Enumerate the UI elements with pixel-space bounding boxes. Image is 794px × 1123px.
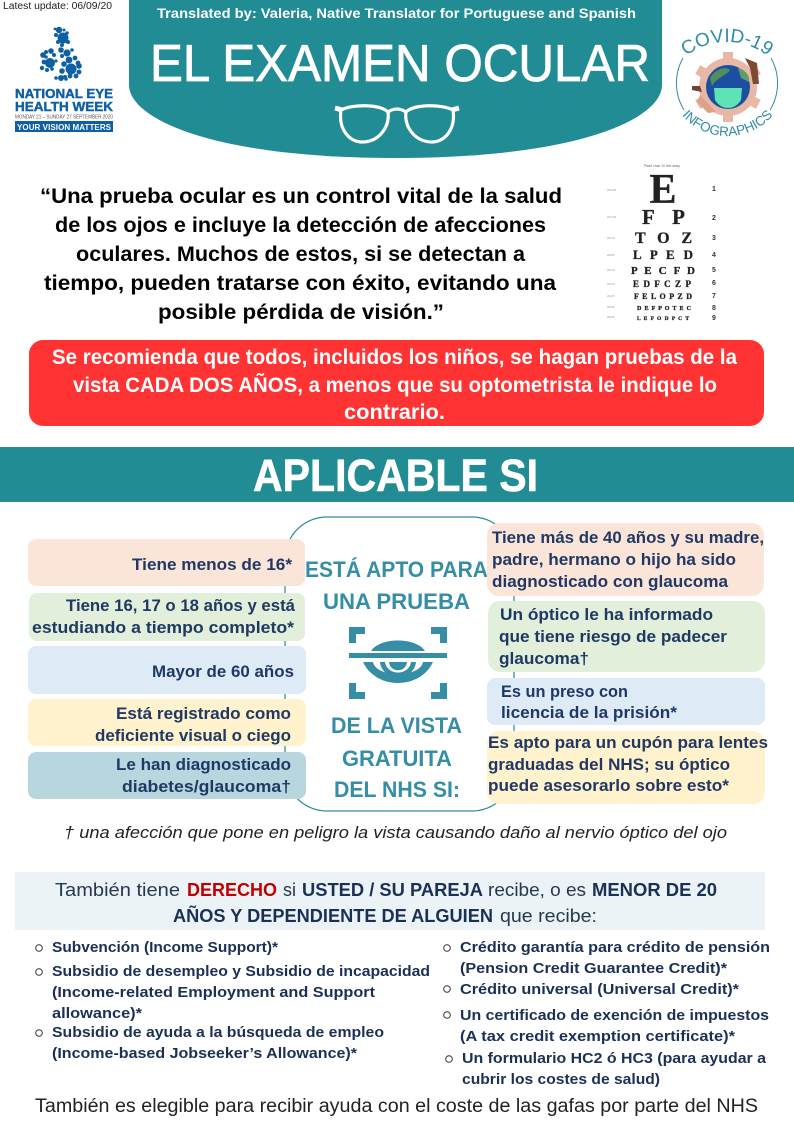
benefit items: Un formulario HC2 ó HC3 (para ayudar a [462,1051,767,1067]
benefit items [52,940,430,1062]
benefit items: Un certificado de exención de impuestos [460,1008,769,1024]
criterion: voucher: graduadas del NHS; su óptico [488,755,730,774]
chart acuity labels: 20/25 [607,294,615,298]
chart acuity labels: 20/70 [607,236,615,240]
chart acuity labels: 20/50 [607,253,615,257]
quote: tiempo, pueden tratarse con éxito, evitando una [44,272,556,295]
quote: oculares. Muchos de estos, si se detectan a [76,243,525,266]
chart letters: L E F O D P C T [637,316,689,322]
entitlement heading band: USTED / SU PAREJA [302,879,483,900]
quote [40,185,562,324]
chart line numbers [712,186,716,322]
criterion: glaucoma risk [488,601,765,672]
chart line numbers: 8 [712,305,716,312]
panel heading bottom: DEL NHS SI: [334,777,460,802]
chart line numbers: 4 [712,252,716,259]
logo wordmark [15,87,113,114]
panel heading bottom [331,713,462,802]
criterion: family glaucoma [487,523,764,596]
icon: scanned eye [349,627,447,699]
criterion: glaucoma risk: glaucoma† [499,649,589,668]
chart letters: E D F C Z P [633,279,692,289]
chart letters: F E L O P Z D [634,292,692,301]
criterion: full-time student: Tiene 16, 17 o 18 años y está [66,596,296,615]
benefit items: Crédito universal (Universal Credit)* [460,982,739,998]
criterion: voucher: Es apto para un cupón para lentes [488,733,768,752]
chart letters: T O Z [635,230,692,247]
bullet markers [444,945,452,1062]
eye test chart [607,163,716,322]
entitlement heading band: También tiene [55,879,180,900]
benefit items: Crédito garantía para crédito de pensión [460,940,770,956]
panel heading bottom: DE LA VISTA [331,713,462,738]
criterion: prisoner on leave: Es un preso con [501,682,628,701]
icon: glasses [335,106,459,142]
logo wordmark: HEALTH WEEK [15,100,113,114]
benefit items: (A tax credit exemption certificate)* [460,1029,735,1045]
criterion: voucher: puede asesorarlo sobre esto* [488,776,729,795]
chart line numbers: 1 [712,186,716,193]
criterion: voucher [487,731,768,804]
entitlement heading band: si [283,879,296,900]
chart letters: L P E D [633,247,693,262]
chart acuity labels: 20/200 [607,188,617,192]
icon: hands around the globe [692,52,761,122]
chart acuity labels [607,188,617,319]
criterion: over 60 [28,646,306,694]
criterion: visually impaired [28,699,306,746]
chart letters: E [650,167,676,213]
criterion: prisoner on leave: licencia de la prisión* [501,703,677,722]
panel heading bottom: GRATUITA [342,746,452,771]
criterion: diabetes or glaucoma: Le han diagnosticado [116,755,291,774]
benefits list: left [36,940,430,1062]
icon: UK map of dots [40,27,82,81]
red callout: contrario. [344,401,445,424]
logo text: COVID-19: COVID-19 [682,28,773,54]
logo wordmark: NATIONAL EYE [15,87,113,101]
logo: COVID-19 infographics [676,28,778,136]
logo ring [676,58,778,110]
closing note: También es elegible para recibir ayuda con el coste de las gafas por parte del NHS [35,1096,758,1117]
entitlement heading band: recibe, o es [488,879,586,900]
entitlement heading band: DERECHO [187,879,277,900]
criterion: under 16 [28,539,305,586]
benefit items: (Pension Credit Guarantee Credit)* [460,961,727,977]
benefits list: right [444,940,770,1088]
chart letters: D E F P O T E C [637,306,691,312]
red callout [29,340,764,426]
criterion: family glaucoma: padre, hermano o hijo ha sido [492,550,736,569]
last update note: Latest update: 06/09/20 [3,1,112,12]
criterion: visually impaired: Está registrado como [116,704,291,723]
criterion: glaucoma risk: Un óptico le ha informado [500,605,713,624]
title: EL EXAMEN OCULAR [150,35,650,93]
criterion: family glaucoma: Tiene más de 40 años y su madre, [492,528,764,547]
red callout: Se recomienda que todos, incluidos los niños, se hagan pruebas de la [52,346,737,369]
red callout: vista CADA DOS AÑOS, a menos que su optometrista le indique lo [73,374,717,397]
central eligibility panel [285,517,514,811]
benefit items: cubrir los costes de salud) [462,1072,660,1088]
chart line numbers: 3 [712,235,716,242]
translator credit: Translated by: Valeria, Native Translator for Portuguese and Spanish [157,5,636,21]
icon: face mask [714,88,742,108]
criterion: full-time student [29,593,305,641]
chart line numbers: 2 [712,215,716,222]
criterion: diabetes or glaucoma: diabetes/glaucoma† [122,777,291,796]
criterion: under 16: Tiene menos de 16* [132,555,292,574]
section band: Aplicable si: APLICABLE SI [253,450,538,501]
logo strapline: YOUR VISION MATTERS [17,123,112,132]
logo text: Infographics: INFOGRAPHICS [682,110,772,136]
chart letters [631,167,695,322]
chart acuity labels: 20/40 [607,268,615,272]
criterion: over 60: Mayor de 60 años [152,662,294,681]
chart line numbers: 7 [712,293,716,300]
chart letters: P E C F D [631,265,695,277]
benefit items: (Income-related Employment and Support [52,985,375,1001]
entitlement heading band: MENOR DE 20 [592,879,717,900]
bullet markers [36,945,42,1036]
banner shape [129,0,662,158]
criterion: prisoner on leave [487,678,765,725]
criterion: full-time student: estudiando a tiempo completo* [32,618,294,637]
chart line numbers: 9 [712,315,716,322]
panel outline [285,517,514,811]
quote: de los ojos e incluye la detección de afecciones [55,214,546,237]
quote: “Una prueba ocular es un control vital de la salud [40,185,562,208]
chart caption: Place chart 10 feet away [644,163,680,168]
entitlement heading band [15,872,765,930]
chart acuity labels: 20/15 [607,315,615,319]
chart acuity labels: 20/30 [607,282,615,286]
panel heading top: UNA PRUEBA [323,589,470,614]
benefit items: Subsidio de ayuda a la búsqueda de empleo [52,1025,384,1041]
chart acuity labels: 20/100 [607,215,617,219]
header banner [129,0,662,158]
entitlement heading band: AÑOS Y DEPENDIENTE DE ALGUIEN [173,905,493,926]
section band: Aplicable si [0,447,794,502]
panel heading top [305,557,488,614]
criterion: diabetes or glaucoma [28,752,306,799]
benefit items: allowance)* [52,1006,142,1022]
quote: posible pérdida de visión.” [158,301,444,324]
criterion: family glaucoma: diagnosticado con glaucoma [492,572,729,591]
benefit items: Subsidio de desempleo y Subsidio de incapacidad [52,964,430,980]
logo dates: MONDAY 21 – SUNDAY 27 SEPTEMBER 2020 [15,114,113,120]
logo: National Eye Health Week [15,27,113,132]
footnote: † una afección que pone en peligro la vista causando daño al nervio óptico del ojo [64,823,727,842]
right criteria column [487,523,768,804]
chart acuity labels: 20/20 [607,305,615,309]
chart line numbers: 6 [712,280,716,287]
left criteria column [28,539,306,799]
chart letters: F P [642,205,685,229]
benefit items [460,940,770,1088]
benefit items: Subvención (Income Support)* [52,940,278,956]
benefit items: (Income-based Jobseeker’s Allowance)* [52,1046,357,1062]
chart line numbers: 5 [712,267,716,274]
panel heading top: ESTÁ APTO PARA [305,557,488,582]
criterion: glaucoma risk: que tiene riesgo de padecer [499,627,727,646]
entitlement heading band: que recibe: [500,905,597,926]
criterion: visually impaired: deficiente visual o ciego [95,726,291,745]
